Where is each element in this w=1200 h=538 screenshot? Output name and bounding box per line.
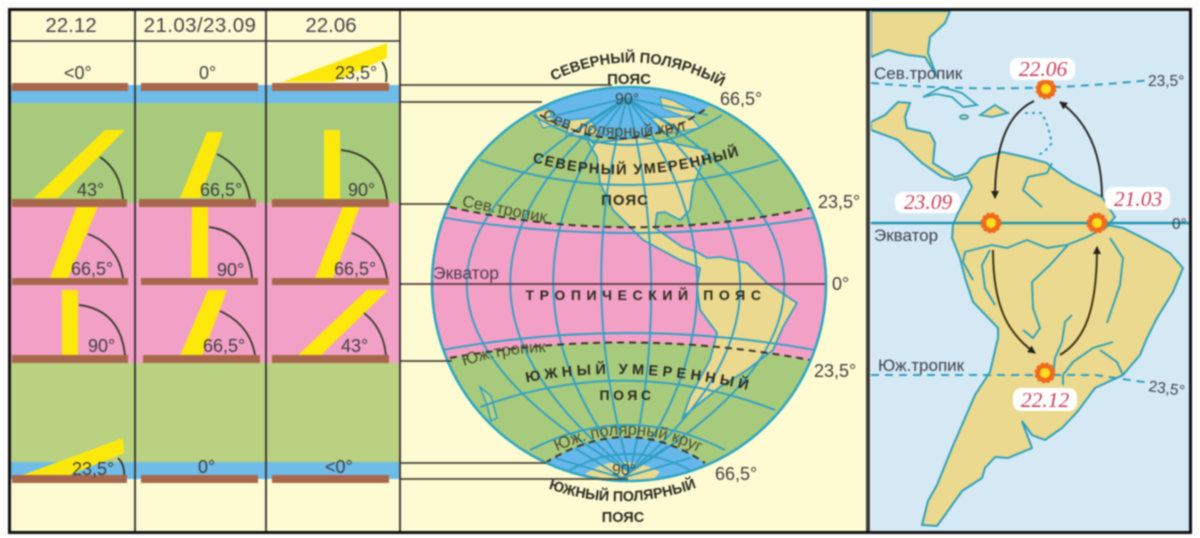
angle values: 90° — [88, 336, 115, 356]
belt labels: ПОЯС — [602, 510, 645, 526]
column headers: 22.12 — [45, 14, 97, 37]
tropic and polar circle lines — [450, 108, 810, 463]
column headers: 22.06 — [305, 14, 357, 37]
date labels: 21.03 — [1114, 187, 1162, 211]
panel: South America map — [871, 11, 1190, 532]
tropical belt — [432, 206, 826, 360]
angle values: 90° — [348, 180, 375, 200]
latitude values: 90° — [615, 91, 639, 108]
angle values: 90° — [217, 260, 244, 280]
map text labels: 0° — [1172, 216, 1187, 233]
latitude values: 66,5° — [720, 89, 762, 109]
map text labels: Юж.тропик — [878, 356, 965, 375]
angle values: 23,5° — [335, 63, 377, 83]
date labels: 23.09 — [904, 190, 952, 214]
meridians — [467, 98, 784, 472]
angle values: 0° — [199, 63, 216, 83]
latitude values — [612, 89, 860, 484]
sun markers — [982, 80, 1106, 382]
belt labels: СЕВЕРНЫЙ ПОЛЯРНЫЙ — [550, 48, 726, 87]
map text labels: Сев.тропик — [874, 64, 963, 83]
belt labels: ПОЯС — [607, 71, 651, 88]
angle values: 66,5° — [334, 259, 376, 279]
belt labels: ПОЯС — [601, 192, 649, 209]
column headers — [45, 14, 357, 37]
angle values: 43° — [77, 180, 104, 200]
parallels — [440, 115, 818, 450]
belt labels: ПОЯС — [600, 387, 654, 403]
latitude values: 0° — [832, 274, 849, 294]
latitude line names — [433, 109, 703, 452]
angle values: 66,5° — [200, 180, 242, 200]
arrows of sun movement — [993, 101, 1102, 355]
map text labels: 23,5° — [1148, 73, 1184, 90]
map text labels — [874, 64, 1187, 400]
belt labels: ТРОПИЧЕСКИЙ ПОЯС — [525, 286, 767, 303]
angle values: <0° — [325, 457, 353, 477]
climate bands — [11, 85, 400, 479]
latitude line names: Сев. полярный круг — [543, 109, 687, 141]
panel: globe — [400, 10, 866, 532]
latitude values: 66,5° — [715, 464, 757, 484]
column headers: 21.03/23.09 — [144, 14, 256, 37]
date labels: 22.06 — [1019, 57, 1067, 81]
angle values — [64, 63, 377, 479]
land: Antarctica — [585, 461, 660, 481]
belt labels — [524, 48, 767, 526]
islands: Lesser Antilles — [1025, 113, 1052, 155]
map text labels: Экватор — [874, 226, 938, 245]
latitude line names: Сев.тропик — [462, 195, 548, 223]
latitude values: 23,5° — [818, 192, 860, 212]
belt labels: ЮЖНЫЙ ПОЛЯРНЫЙ — [548, 475, 696, 502]
leader lines — [400, 85, 825, 479]
islands: Caribbean — [923, 87, 1008, 119]
angle values: 0° — [198, 457, 215, 477]
latitude values: 23,5° — [814, 361, 856, 381]
latitude line names: Юж.тропик — [461, 342, 546, 366]
land: Americas — [580, 128, 797, 417]
latitude line names: Экватор — [433, 263, 499, 283]
globe — [430, 84, 828, 484]
equator — [871, 222, 1190, 224]
New Zealand — [480, 387, 497, 421]
date labels: 22.12 — [1021, 388, 1069, 412]
south polar cap — [548, 436, 706, 479]
angle arcs — [79, 62, 387, 476]
panel: sun angle table — [10, 10, 400, 532]
angle values: 66,5° — [203, 336, 245, 356]
belt labels: ЮЖНЫЙ УМЕРЕННЫЙ — [524, 360, 750, 390]
angle values: 43° — [341, 336, 368, 356]
latitude values: 90° — [612, 462, 636, 479]
north polar cap — [540, 87, 710, 140]
belt labels: СЕВЕРНЫЙ УМЕРЕННЫЙ — [532, 142, 739, 176]
polar grid mesh — [545, 98, 708, 478]
angle values: 23,5° — [72, 459, 114, 479]
land: North America — [871, 11, 950, 77]
land: Central and South America — [871, 102, 1183, 526]
land: arctic islands — [535, 97, 700, 136]
northern tropic — [871, 80, 1150, 88]
sun rays — [20, 43, 388, 476]
angle values: <0° — [64, 63, 92, 83]
rivers — [963, 163, 1123, 385]
map text labels: 23,5° — [1147, 378, 1186, 400]
southern tropic — [871, 375, 1150, 383]
angle values: 66,5° — [71, 259, 113, 279]
horizontal surface bars — [12, 83, 389, 483]
date labels — [895, 57, 1170, 412]
latitude line names: Юж. полярный круг — [553, 425, 703, 452]
